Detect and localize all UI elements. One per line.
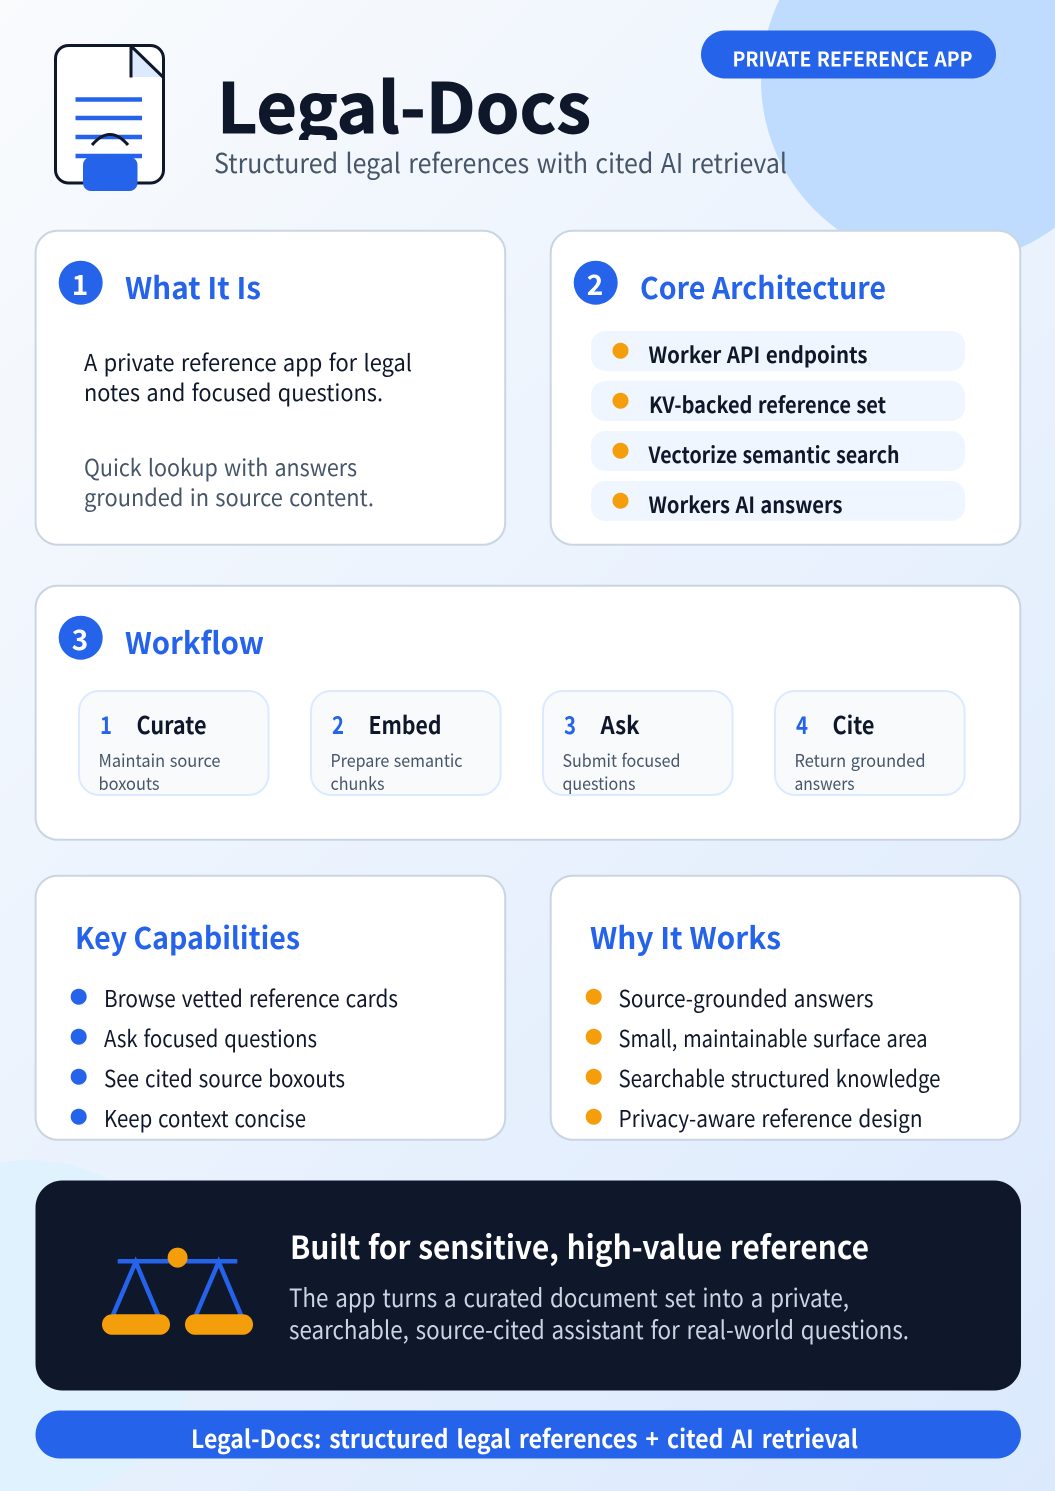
- bullet: keep: Keep context concise: [104, 1100, 306, 1134]
- step: ask: [543, 691, 732, 796]
- supporting text: [84, 449, 374, 513]
- supporting text: Quick lookup with answers: [84, 449, 357, 483]
- bullet: small: Small, maintainable surface area: [618, 1020, 928, 1054]
- step: ask: Ask: [600, 706, 640, 741]
- step: cite: Cite: [832, 706, 874, 741]
- callout body: searchable, source-cited assistant for real-world questions.: [289, 1311, 909, 1347]
- item: vectorize semantic search: [591, 431, 965, 471]
- heading: Core Architecture: [640, 264, 886, 308]
- bullet: see: See cited source boxouts: [104, 1060, 345, 1094]
- subtitle: Structured legal references with cited AI retrieval: [214, 142, 787, 181]
- badge: private reference app: [701, 30, 996, 78]
- step: cite: Return grounded: [794, 748, 926, 773]
- description text: [84, 344, 412, 408]
- bullet: browse: Browse vetted reference cards: [104, 980, 398, 1014]
- step: ask: questions: [562, 771, 636, 796]
- item: worker api endpoints: [591, 331, 965, 371]
- item: workers ai answers: [591, 481, 965, 521]
- step: curate: boxouts: [98, 771, 160, 796]
- panel: what it is: [36, 231, 505, 545]
- step badge 2: [574, 261, 618, 305]
- item: worker api endpoints: Worker API endpoints: [648, 338, 868, 370]
- panel: key capabilities: [36, 876, 505, 1140]
- item: workers ai answers: Workers AI answers: [648, 488, 843, 520]
- description text: A private reference app for legal: [84, 344, 412, 378]
- icon: scales of justice: [102, 1248, 253, 1335]
- heading: Key Capabilities: [75, 914, 300, 958]
- icon: legal document with lock: [56, 46, 164, 191]
- item: kv-backed reference set: KV-backed reference set: [649, 388, 886, 420]
- heading: What It Is: [125, 264, 261, 308]
- step badge 1: 1: [72, 264, 88, 304]
- step: ask: 3: [564, 706, 576, 741]
- callout body: [289, 1279, 909, 1347]
- step: curate: Curate: [136, 706, 206, 741]
- step: ask: Submit focused: [562, 748, 680, 773]
- panel: why it works: [551, 876, 1020, 1140]
- callout: built for sensitive: [36, 1180, 1021, 1390]
- step: curate: Maintain source: [98, 748, 220, 773]
- bullet: source-grounded: Source-grounded answers: [618, 980, 874, 1014]
- bullet: ask: Ask focused questions: [104, 1020, 317, 1054]
- step: embed: 2: [332, 706, 344, 741]
- step: embed: [311, 691, 500, 796]
- callout body: The app turns a curated document set into a private,: [289, 1279, 849, 1315]
- description text: notes and focused questions.: [84, 374, 383, 408]
- bullet: privacy: Privacy-aware reference design: [618, 1100, 922, 1134]
- item: vectorize semantic search: Vectorize semantic search: [648, 438, 900, 470]
- callout heading: Built for sensitive, high-value reference: [290, 1223, 869, 1269]
- step: cite: [775, 691, 964, 796]
- panel: workflow: [36, 586, 1020, 840]
- heading: Why It Works: [590, 914, 781, 958]
- step badge 3: [59, 616, 103, 660]
- banner: summary: [36, 1410, 1021, 1458]
- supporting text: grounded in source content.: [84, 479, 374, 513]
- badge: private reference app: PRIVATE REFERENCE APP: [732, 44, 972, 72]
- step: embed: Embed: [368, 706, 442, 741]
- heading: Workflow: [125, 619, 264, 663]
- item: kv-backed reference set: [591, 381, 965, 421]
- step: embed: chunks: [330, 771, 384, 796]
- step: curate: [79, 691, 268, 796]
- banner: summary: Legal-Docs: structured legal references + cited AI retrieval: [191, 1420, 858, 1456]
- step: curate: 1: [100, 706, 112, 741]
- step: embed: Prepare semantic: [330, 748, 463, 773]
- step: cite: 4: [796, 706, 808, 741]
- step: cite: answers: [794, 771, 854, 796]
- title: Legal-Docs: [217, 53, 591, 153]
- bullet: searchable: Searchable structured knowledge: [618, 1060, 940, 1094]
- step badge 1: [59, 261, 103, 305]
- panel: core architecture: [551, 231, 1020, 545]
- step badge 2: 2: [587, 264, 603, 304]
- step badge 3: 3: [72, 619, 88, 659]
